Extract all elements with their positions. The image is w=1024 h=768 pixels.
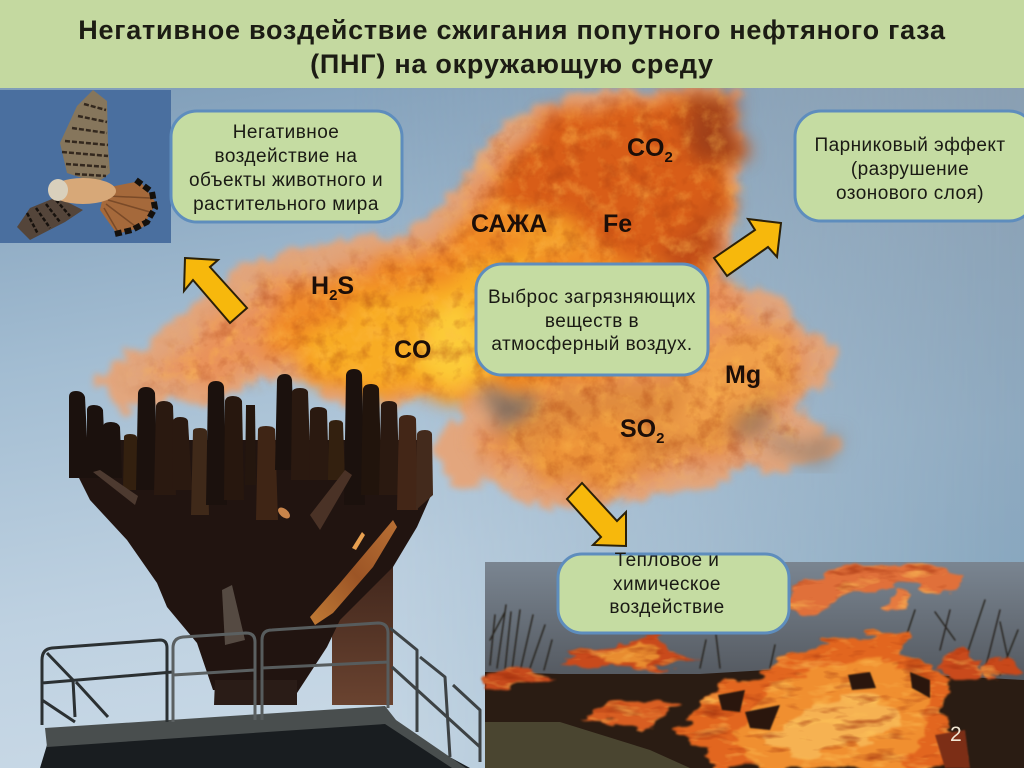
callout: thermal and chemical impact: [558, 550, 789, 633]
callout text: растительного мира: [193, 194, 379, 215]
callout text: атмосферный воздух.: [491, 334, 693, 355]
arrow: to thermal impact: [567, 483, 626, 546]
callout text: Негативное: [233, 122, 339, 143]
smoke patches: [490, 388, 840, 462]
label: SO2: 2: [656, 430, 664, 447]
callout: greenhouse effect: [795, 111, 1024, 221]
callout text: воздействие на: [215, 146, 357, 167]
callout text: Выброс загрязняющих: [488, 287, 696, 308]
label: H2S: 2: [329, 287, 337, 304]
arrow: to animals and plants: [184, 258, 247, 323]
callout text: Парниковый эффект: [814, 135, 1006, 156]
flame: red upper plume: [490, 95, 735, 280]
callout text: озонового слоя): [836, 183, 984, 204]
arrow: to greenhouse effect: [714, 219, 781, 276]
flame dark gaps: [718, 672, 970, 768]
label: Fe: Fe: [603, 210, 632, 238]
callout: pollutant emission: [476, 264, 708, 375]
callout: animals and plants: [171, 111, 402, 222]
callout text: (разрушение: [851, 159, 969, 180]
label: CO: CO: [394, 336, 432, 364]
label: SO2: SO: [620, 415, 656, 443]
glowing spot: [276, 505, 292, 521]
flare stack: [40, 369, 480, 768]
lower wing: [17, 197, 83, 240]
burnt ground: [485, 668, 1024, 768]
ground fires: [484, 563, 1020, 768]
flame: curl mottling: [120, 95, 825, 500]
flame: pale outer fringe: [95, 90, 850, 510]
copper glint: [352, 532, 365, 550]
copper highlight: [310, 520, 397, 625]
label: soot: САЖА: [471, 210, 547, 238]
stack column: [332, 540, 393, 705]
label: H2S: S: [337, 272, 354, 300]
platform railings: [42, 623, 480, 762]
flame: yellow core: [300, 205, 790, 480]
callout text: воздействие: [609, 597, 725, 618]
bird head: [48, 179, 68, 201]
bird body: [50, 178, 116, 204]
burner shading: [222, 585, 245, 645]
stack burner body: [69, 440, 432, 693]
tail fan: [100, 180, 156, 234]
callout text: Тепловое и: [615, 550, 719, 571]
bird photo: [0, 90, 171, 243]
fire photo sky: [485, 562, 1024, 768]
burner shading: [310, 470, 352, 530]
photo background: [0, 90, 171, 243]
callout text: объекты животного и: [189, 170, 383, 191]
label: H2S: H: [311, 272, 329, 300]
burner base: [214, 680, 297, 705]
callout text: химическое: [613, 574, 721, 595]
title text: Негативное воздействие сжигания попутного нефтяного газа: [78, 15, 946, 45]
page number: 2: [950, 723, 962, 746]
gas flare flame: [95, 90, 850, 510]
dry ground: [485, 722, 690, 768]
label: Mg: Mg: [725, 361, 761, 389]
title banner: [0, 0, 1024, 88]
dry grass: [490, 600, 1018, 675]
field fire photo: [484, 562, 1024, 768]
label: CO2: CO: [627, 134, 664, 162]
label: CO2: 2: [664, 149, 673, 166]
burner fingers: [69, 369, 433, 520]
platform deck: [40, 722, 470, 768]
upper wing: [60, 90, 110, 183]
flame: main colour: [140, 95, 815, 490]
callout text: веществ в: [545, 311, 639, 332]
burner shading: [93, 470, 138, 505]
title second line: (ПНГ) на окружающую среду: [310, 49, 714, 79]
